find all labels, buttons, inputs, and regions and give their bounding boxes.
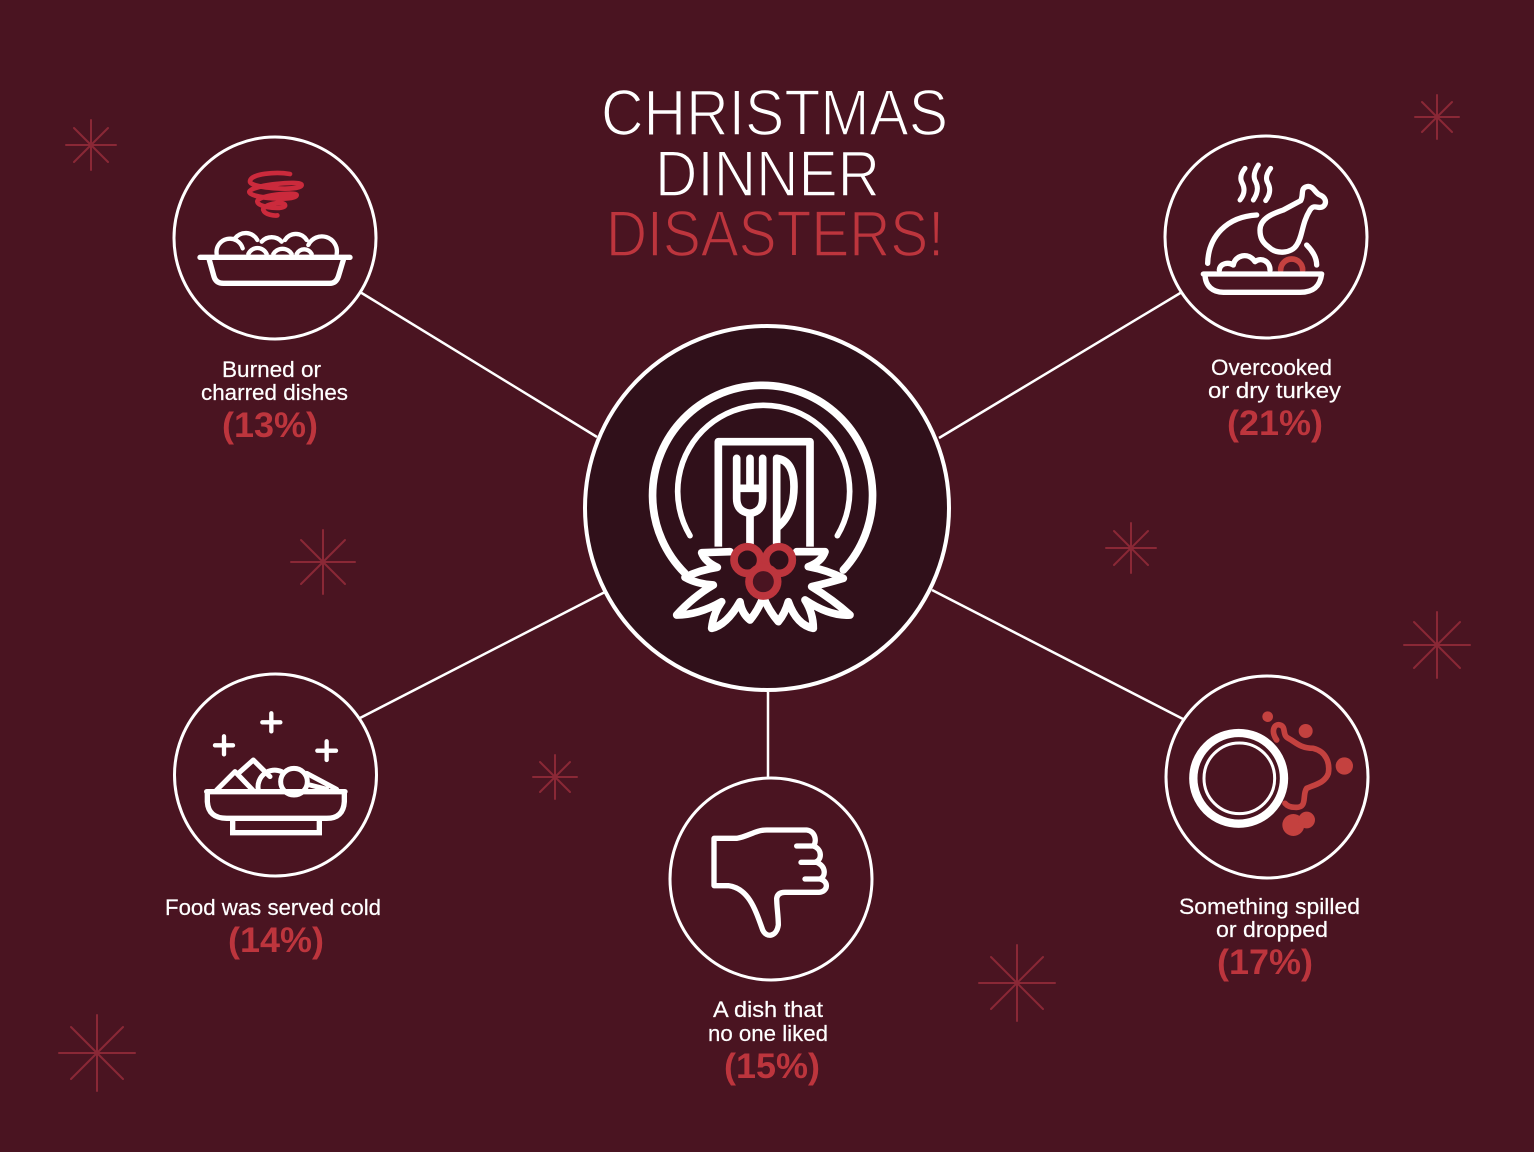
icon: burned dish with smoke xyxy=(200,173,350,283)
icon: spilled plate xyxy=(1193,711,1353,836)
label: a dish that no one liked: A dish that xyxy=(713,997,823,1022)
icon: roast turkey xyxy=(1203,165,1325,292)
label: something spilled or dropped: or dropped xyxy=(1216,917,1328,942)
label: something spilled or dropped: (17%) xyxy=(1217,943,1313,982)
label: burned or charred dishes: Burned or xyxy=(222,357,321,382)
label: burned or charred dishes: charred dishes xyxy=(201,380,348,405)
panel: a dish that no one liked xyxy=(670,778,872,1086)
label: food was served cold: (14%) xyxy=(228,921,324,960)
icon: cold food bowl xyxy=(207,713,345,833)
label: something spilled or dropped: Something spilled xyxy=(1179,894,1360,919)
label: something spilled or dropped xyxy=(1179,894,1360,982)
icon: plate with cutlery and holly xyxy=(653,385,873,628)
label: a dish that no one liked: no one liked xyxy=(708,1021,828,1046)
title: CHRISTMAS xyxy=(601,76,948,149)
panel: food was served cold xyxy=(165,674,381,960)
title: DISASTERS! xyxy=(606,197,944,270)
label: food was served cold: Food was served cold xyxy=(165,895,381,920)
panel: central plate xyxy=(585,326,949,690)
label: a dish that no one liked: (15%) xyxy=(724,1047,820,1086)
label: overcooked or dry turkey: or dry turkey xyxy=(1208,378,1341,403)
panel: burned or charred dishes xyxy=(174,137,376,445)
label: overcooked or dry turkey: (21%) xyxy=(1227,404,1323,443)
panel: something spilled or dropped xyxy=(1166,676,1368,982)
title: DINNER xyxy=(655,137,880,210)
label: overcooked or dry turkey xyxy=(1208,355,1341,443)
icon: thumbs down xyxy=(714,830,826,935)
title xyxy=(601,76,948,270)
label: food was served cold xyxy=(165,895,381,960)
label: overcooked or dry turkey: Overcooked xyxy=(1211,355,1332,380)
label: burned or charred dishes: (13%) xyxy=(222,406,318,445)
label: a dish that no one liked xyxy=(708,997,828,1086)
panel: overcooked or dry turkey xyxy=(1165,136,1367,443)
label: burned or charred dishes xyxy=(201,357,348,445)
